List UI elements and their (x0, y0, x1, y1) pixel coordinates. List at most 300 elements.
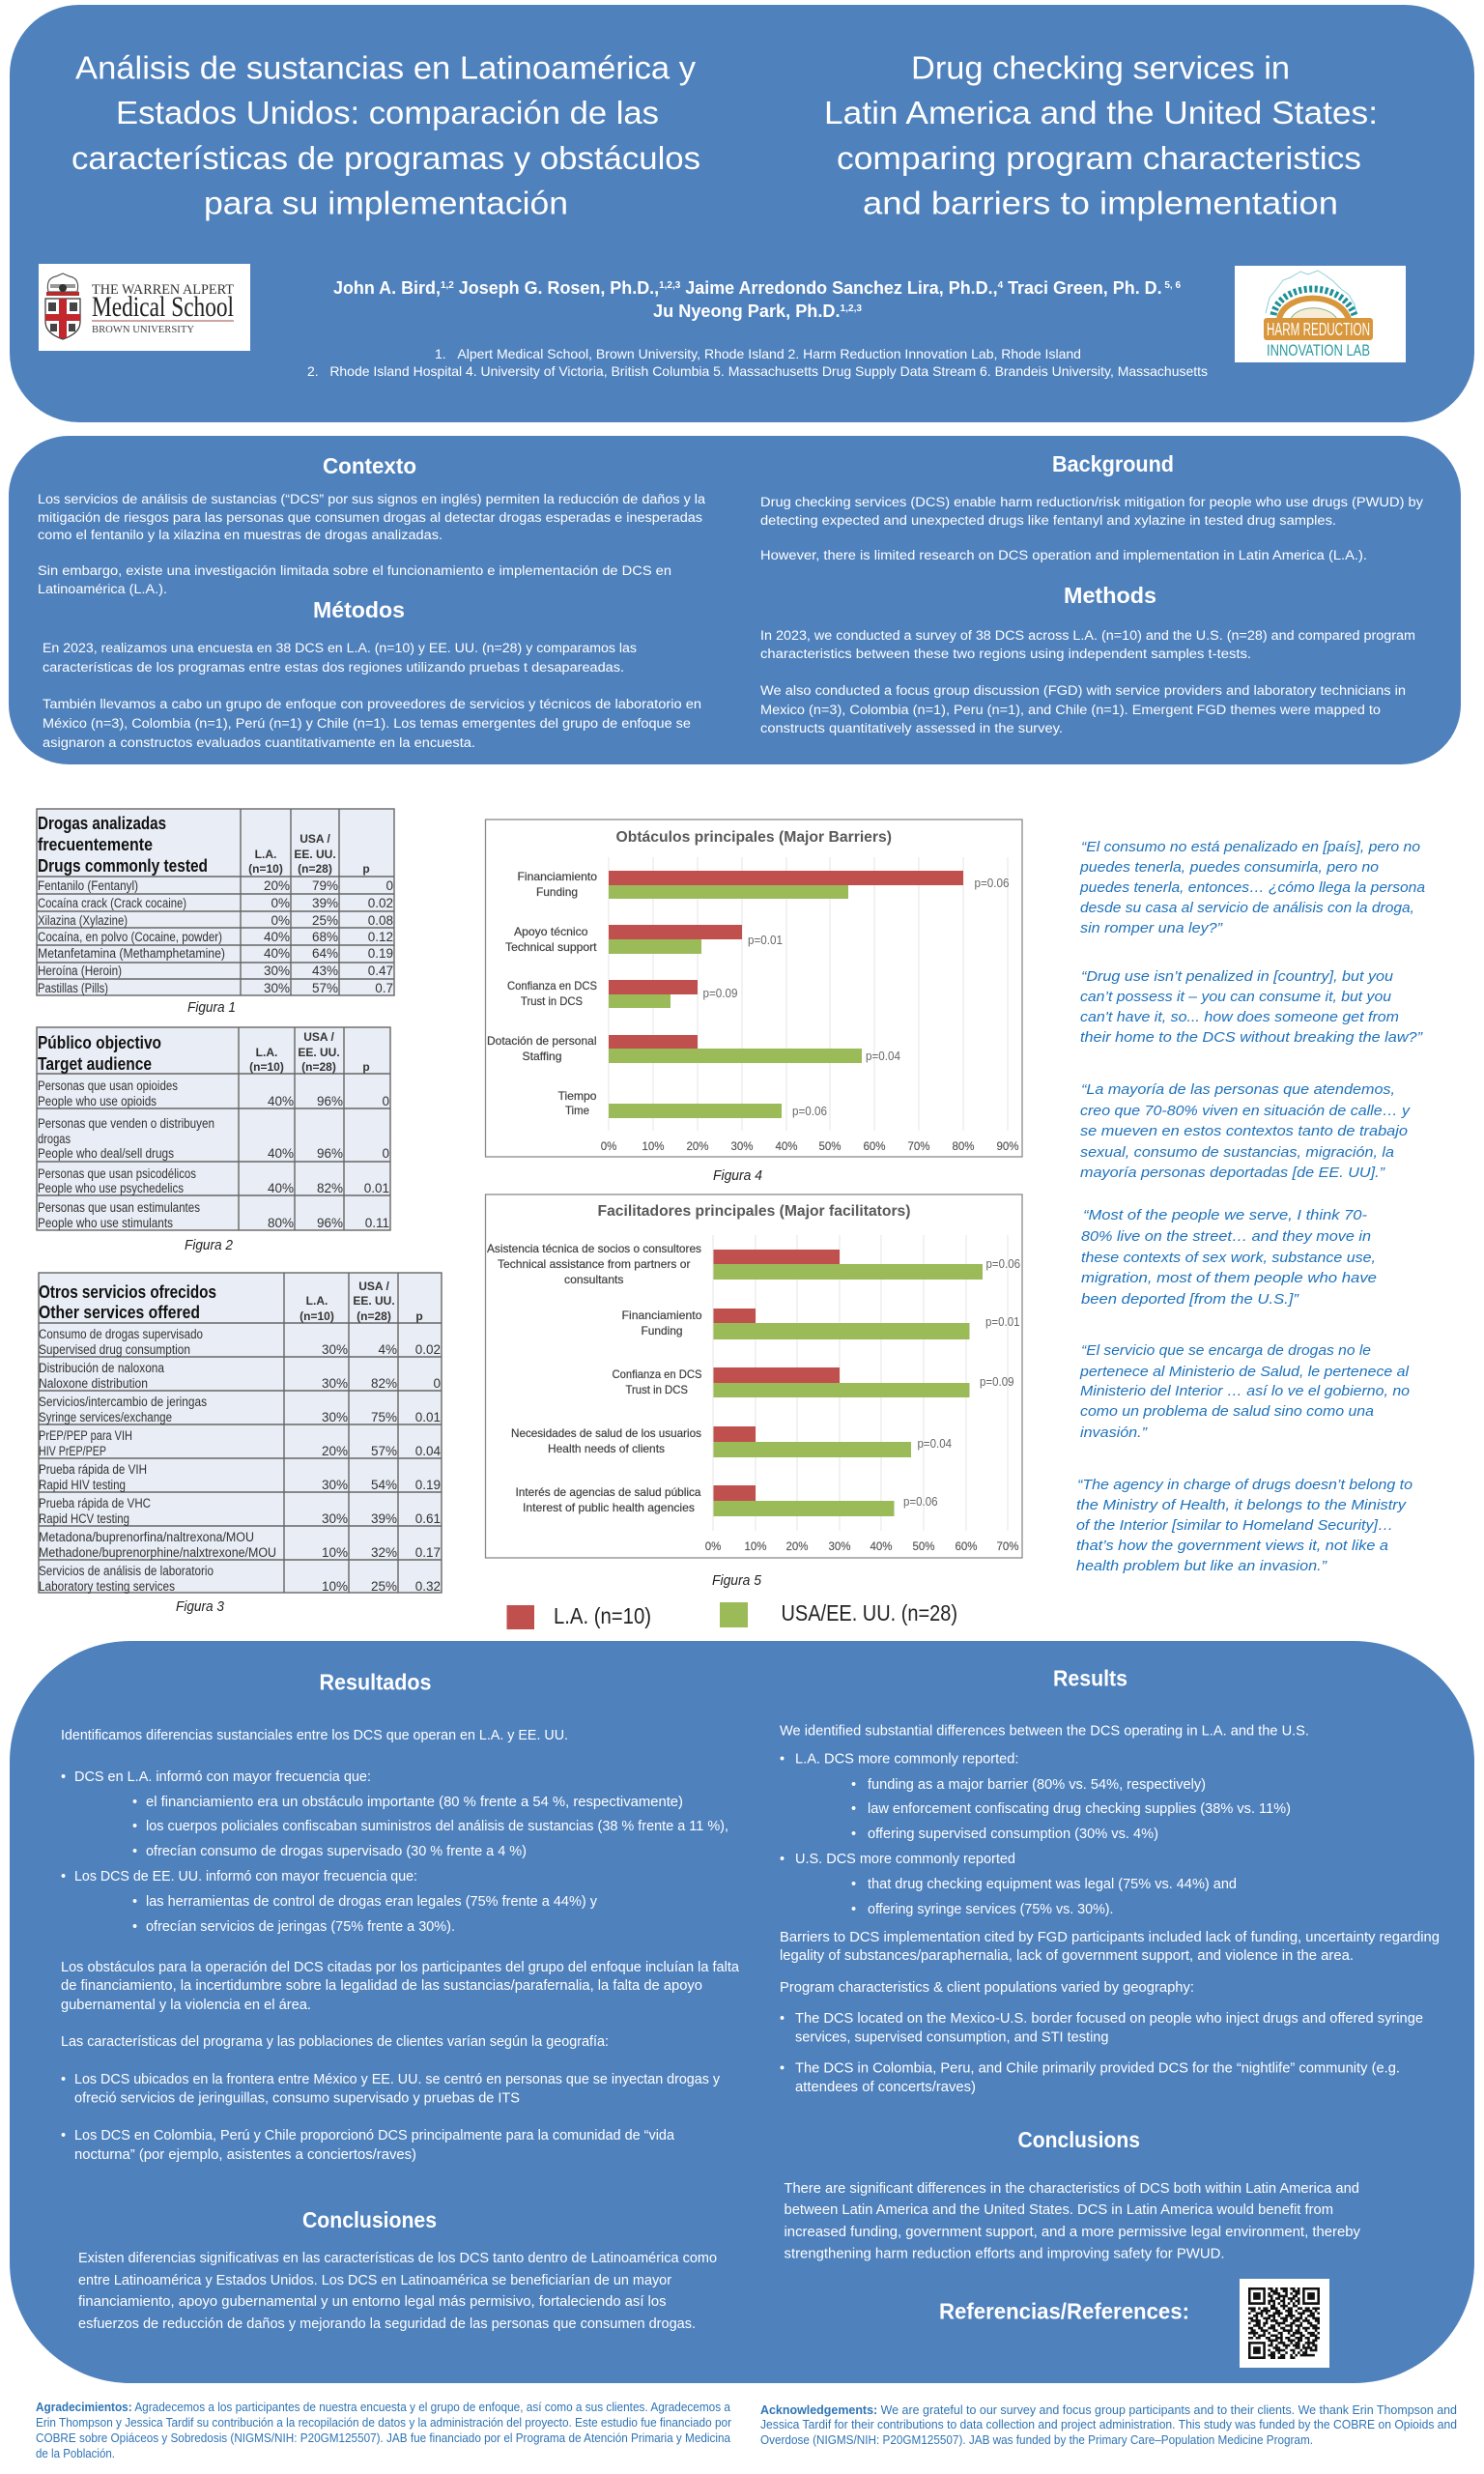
axis labels: 0% (601, 1141, 616, 1153)
table: other services offered: p (415, 1309, 423, 1323)
caption: Figura 3: Figura 3 (176, 1598, 225, 1615)
acknowledgments: English: Acknowledgements: We are grateful to our survey and focus group participants and to their clients. We thank Erin Thompson and (760, 2403, 1457, 2417)
text: Results: offering syringe services (75% vs. 30%). (868, 1902, 1113, 1917)
table: other services offered: 54% (371, 1478, 397, 1492)
title: English (824, 50, 1378, 220)
text: Resultados: • (61, 1769, 66, 1785)
quote 5: como un problema de salud sino como una (1080, 1403, 1374, 1420)
axis labels: 50% (912, 1541, 935, 1553)
heading: Methods: Methods (1064, 583, 1156, 608)
table: target audience: (n=28) (301, 1060, 336, 1074)
table: drugs commonly tested: Drogas analizadas (38, 814, 166, 833)
table: target audience: 0.01 (364, 1181, 389, 1195)
legend: USA/EE. UU. (n=28) (781, 1600, 957, 1625)
text: Results: funding as a major barrier (80% vs. 54%, respectively) (868, 1777, 1206, 1793)
table: other services offered: 0.61 (415, 1511, 441, 1526)
text: Results: We identified substantial differences between the DCS operating in L.A. and the U.S. (780, 1724, 1309, 1740)
title: Spanish: Análisis de sustancias en Latinoamérica y (75, 50, 697, 85)
text: Results: The DCS in Colombia, Peru, and Chile primarily provided DCS for the “nightlife” community (e.g. (795, 2060, 1400, 2076)
p values: p=0.06 (792, 1105, 827, 1118)
text: Resultados: las herramientas de control de drogas eran legales (75% frente a 44%) y (146, 1894, 598, 1910)
category labels: Confianza en DCS (507, 979, 597, 992)
title: Spanish: para su implementación (204, 186, 568, 220)
table: drugs commonly tested: 79% (312, 878, 338, 893)
caption: Figura 4: Figura 4 (713, 1167, 762, 1184)
table: target audience: Target audience (38, 1054, 152, 1074)
p values: p=0.01 (748, 934, 783, 947)
heading: Conclusions: Conclusions (1018, 2127, 1140, 2152)
p values: p=0.06 (985, 1257, 1020, 1271)
table: target audience: People who use opioids (38, 1094, 157, 1108)
logo: Harm Reduction Innovation Lab: INNOVATION LAB (1267, 341, 1370, 360)
table: drugs commonly tested: 0% (271, 896, 290, 910)
table: target audience: 40% (268, 1094, 294, 1108)
table: drugs commonly tested: p (362, 862, 370, 876)
bars: USA (609, 885, 862, 1118)
text: Resultados: de financiamiento, la incertidumbre sobre la legalidad de las sustancias/parafernalia, la falta de apoyo (61, 1978, 702, 1994)
text: Métodos: asignaron a constructos evaluados cuantitativamente en la encuesta. (43, 735, 475, 750)
table: other services offered: Prueba rápida de VIH (39, 1462, 147, 1477)
text: Results: • (851, 1877, 856, 1892)
affiliations (307, 346, 1208, 379)
panel: header (10, 5, 1474, 422)
category labels: Asistencia técnica de socios o consultores (487, 1242, 701, 1255)
table: other services offered: 0.04 (415, 1444, 441, 1458)
table: other services offered: 30% (322, 1342, 348, 1357)
table: other services offered: 25% (371, 1579, 397, 1594)
text: Resultados: Los obstáculos para la operación del DCS citadas por los participantes del grupo del enfoque incluían la falta (61, 1960, 740, 1975)
table: drugs commonly tested: 0% (271, 913, 290, 928)
axis labels: 10% (744, 1541, 767, 1553)
quote 5 (1079, 1342, 1410, 1441)
text: Background (760, 495, 1423, 562)
authors: Joseph G. Rosen, Ph.D., (454, 278, 659, 298)
text: Methods: constructs quantitatively assessed in the survey. (760, 721, 1063, 735)
QR code (1240, 2279, 1329, 2368)
table: drugs commonly tested: 0.12 (368, 930, 393, 944)
text: Results: • (851, 1827, 856, 1842)
quote 4: been deported [from the U.S.]” (1081, 1291, 1299, 1308)
table: other services offered: (n=10) (300, 1309, 334, 1323)
axis labels: 70% (996, 1541, 1019, 1553)
text: Results: • (851, 1801, 856, 1817)
table: target audience: EE. UU. (298, 1046, 340, 1059)
text: Results: • (780, 2060, 785, 2076)
authors: 5, 6 (1162, 280, 1181, 291)
p values: p=0.09 (980, 1375, 1014, 1389)
chart: major facilitators: Facilitadores principales (Major facilitators) (597, 1203, 910, 1220)
table: drugs commonly tested: 0.47 (368, 964, 393, 978)
table: target audience: 0 (382, 1146, 389, 1161)
text: Métodos: México (n=3), Colombia (n=1), Perú (n=1) y Chile (n=1). Los temas emergentes del grupo de enfoque se (43, 716, 691, 731)
table: other services offered: 4% (378, 1342, 397, 1357)
table: other services offered: 0.01 (415, 1410, 441, 1424)
axis labels: 30% (828, 1541, 851, 1553)
table: other services offered: Consumo de drogas supervisado (39, 1327, 203, 1341)
quote 4: these contexts of sex work, substance use, (1081, 1250, 1376, 1266)
title: English: Latin America and the United States: (824, 95, 1378, 130)
axis labels: 40% (870, 1541, 893, 1553)
quote 3: “La mayoría de las personas que atendemos, (1081, 1081, 1395, 1098)
text: Resultados: • (132, 1919, 137, 1935)
category labels: Necesidades de salud de los usuarios (511, 1426, 701, 1440)
table: other services offered: Methadone/buprenorphine/nalxtrexone/MOU (39, 1545, 276, 1560)
category labels (487, 870, 597, 1117)
table: target audience: Personas que venden o distribuyen (38, 1116, 214, 1131)
table: drugs commonly tested: Cocaína crack (Crack cocaine) (38, 896, 186, 910)
logo: Warren Alpert Medical School: THE WARREN ALPERT (92, 282, 234, 298)
table: other services offered: 0.32 (415, 1579, 441, 1594)
quote 1: puedes tenerla, puedes consumirla, pero no (1079, 859, 1379, 876)
table: other services offered: 30% (322, 1376, 348, 1391)
category labels: Apoyo técnico (514, 925, 588, 938)
chart: major facilitators (485, 1194, 1022, 1558)
text: Resultados: el financiamiento era un obstáculo importante (80 % frente a 54 %, respectivamente) (146, 1795, 683, 1810)
authors (333, 278, 1181, 321)
table: drugs commonly tested: L.A. (255, 848, 276, 861)
table: drugs commonly tested: 40% (264, 946, 290, 961)
text: Results: • (780, 1751, 785, 1767)
table: other services offered: 30% (322, 1478, 348, 1492)
category labels: Dotación de personal (487, 1034, 597, 1048)
text: Contexto: Los servicios de análisis de sustancias (“DCS” por sus signos en inglés) permiten la reducción de daños y la (38, 492, 706, 506)
p values (903, 1257, 1020, 1509)
text: Results: The DCS located on the Mexico-U.S. border focused on people who inject drugs and offered syringe (795, 2011, 1423, 2027)
authors: 1,2,3 (659, 280, 681, 291)
text: Conclusiones (78, 2251, 717, 2332)
text: Conclusions (785, 2181, 1361, 2261)
table: drugs commonly tested: 39% (312, 896, 338, 910)
table: target audience: USA / (303, 1030, 334, 1044)
text: Results: U.S. DCS more commonly reported (795, 1852, 1015, 1867)
quote 6: of the Interior [similar to Homeland Security]… (1076, 1517, 1393, 1534)
table: drugs commonly tested: Pastillas (Pills) (38, 981, 108, 995)
table: target audience (37, 1027, 390, 1230)
category labels: Funding (536, 885, 578, 899)
table: target audience: Personas que usan psicodélicos (38, 1166, 196, 1181)
quote 1: puedes tenerla, entonces… ¿cómo llega la persona (1079, 879, 1425, 896)
quote 5: Ministerio del Interior … así lo ve el gobierno, no (1080, 1383, 1410, 1399)
table: drugs commonly tested: 0.7 (375, 981, 393, 995)
affiliations: 1. Alpert Medical School, Brown University, Rhode Island 2. Harm Reduction Innovation Lab, Rhode Island (435, 346, 1081, 361)
table: other services offered: Distribución de naloxona (39, 1361, 164, 1375)
text: Contexto: Latinoamérica (L.A.). (38, 582, 167, 596)
table: target audience: People who deal/sell drugs (38, 1146, 174, 1161)
quote 5: invasión.” (1080, 1424, 1148, 1441)
quote 2: can't have it, so... how does someone get from (1080, 1009, 1399, 1025)
table: other services offered: Supervised drug consumption (39, 1342, 190, 1357)
table: drugs commonly tested: (n=10) (248, 862, 283, 876)
text: Results: • (851, 1902, 856, 1917)
axis labels (601, 1141, 1019, 1153)
quote 3 (1080, 1081, 1412, 1181)
authors: Jaime Arredondo Sanchez Lira, Ph.D., (680, 278, 998, 298)
quote 1: “El consumo no está penalizado en [país], pero no (1081, 839, 1420, 855)
table: drugs commonly tested: 0.08 (368, 913, 393, 928)
text: Resultados: • (132, 1819, 137, 1834)
table: drugs commonly tested: Metanfetamina (Methamphetamine) (38, 946, 225, 961)
heading: Background: Background (1052, 451, 1174, 476)
category labels: Interest of public health agencies (523, 1501, 695, 1514)
text: Results: legality of substances/paraphernalia, lack of government support, and violence in the area. (780, 1948, 1354, 1964)
title: English: comparing program characteristics (837, 140, 1361, 176)
category labels: Technical assistance from partners or (498, 1257, 691, 1271)
acknowledgments: Spanish: de la Población. (36, 2447, 115, 2460)
text: Results: services, supervised consumption, and STI testing (795, 2029, 1109, 2045)
heading: Results: Results (1053, 1666, 1127, 1691)
table: other services offered: 39% (371, 1511, 397, 1526)
heading: references: Referencias/References: (939, 2298, 1189, 2323)
text: Resultados: • (132, 1844, 137, 1859)
title: Spanish (71, 50, 700, 220)
header background (10, 5, 1474, 422)
quote 3: se mueven en estos contextos tanto de trabajo (1080, 1123, 1408, 1139)
text: Resultados: gubernamental y la violencia en el área. (61, 1998, 311, 2013)
legend: L.A. (n=10) (554, 1603, 651, 1628)
table: other services offered: 32% (371, 1545, 397, 1560)
text: Results: law enforcement confiscating drug checking supplies (38% vs. 11%) (868, 1801, 1291, 1817)
table: drugs commonly tested: Xilazina (Xylazine) (38, 913, 128, 928)
category labels: Staffing (522, 1050, 562, 1063)
text: Resultados: ofrecían consumo de drogas supervisado (30 % frente a 4 %) (146, 1844, 527, 1859)
p values: p=0.09 (703, 987, 738, 1000)
table: drugs commonly tested: Heroína (Heroin) (38, 964, 122, 978)
text: Background: Drug checking services (DCS) enable harm reduction/risk mitigation for people who use drugs (PWUD) by (760, 495, 1423, 509)
table: target audience: People who use psychedelics (38, 1181, 184, 1195)
text: Conclusiones: financiamiento, apoyo gubernamental y un entorno legal más permisivo, fortaleciendo así los (78, 2294, 667, 2310)
quote 4: migration, most of them people who have (1081, 1270, 1377, 1286)
axis labels: 20% (785, 1541, 809, 1553)
table: other services offered: Servicios de análisis de laboratorio (39, 1564, 214, 1578)
axis labels: 10% (642, 1141, 665, 1153)
table: target audience: drogas (38, 1132, 71, 1146)
text: Conclusiones: entre Latinoamérica y Estados Unidos. Los DCS en Latinoamérica se beneficiarían de un mayor (78, 2273, 671, 2288)
heading: Conclusiones: Conclusiones (302, 2207, 437, 2232)
axis labels: 40% (775, 1141, 798, 1153)
title: English: and barriers to implementation (863, 186, 1338, 220)
authors: 1,2,3 (841, 303, 862, 314)
table: other services offered: 10% (322, 1545, 348, 1560)
table: other services offered: 20% (322, 1444, 348, 1458)
authors: 4 (998, 280, 1004, 291)
authors: Traci Green, Ph. D. (1003, 278, 1162, 298)
text: Methods: Mexico (n=3), Colombia (n=1), Peru (n=1), and Chile (n=1). Emergent FGD themes were mapped to (760, 703, 1381, 717)
text: Results: offering supervised consumption (30% vs. 4%) (868, 1827, 1158, 1842)
table: target audience: p (362, 1060, 370, 1074)
axis labels: 30% (730, 1141, 754, 1153)
axis labels: 70% (907, 1141, 930, 1153)
quote 6: health problem but like an invasion.” (1076, 1558, 1327, 1574)
text: Resultados: nocturna” (por ejemplo, asistentes a conciertos/raves) (74, 2147, 416, 2163)
axis labels: 50% (818, 1141, 842, 1153)
text: Results: attendees of concerts/raves) (795, 2080, 976, 2095)
table: other services offered: Other services offered (39, 1303, 200, 1322)
table: drugs commonly tested: EE. UU. (294, 848, 336, 861)
table: drugs commonly tested: Drugs commonly tested (38, 856, 208, 876)
affiliations: 2. Rhode Island Hospital 4. University of Victoria, British Columbia 5. Massachusetts Drug Supply Data Stream 6. Brandeis University, Massachusetts (307, 363, 1208, 379)
text: Conclusions: increased funding, government support, and a more permissive legal environment, thereby (785, 2225, 1361, 2240)
text: Resultados: • (61, 2128, 66, 2143)
table: other services offered: (n=28) (357, 1309, 391, 1323)
text: Resultados: ofrecían servicios de jeringas (75% frente a 30%). (146, 1919, 455, 1935)
axis labels: 60% (955, 1541, 978, 1553)
quote 3: creo que 70-80% viven en situación de calle… y (1080, 1103, 1412, 1119)
text: Conclusions: strengthening harm reduction efforts and improving safety for PWUD. (785, 2246, 1225, 2261)
category labels: Confianza en DCS (613, 1367, 701, 1381)
bars: L.A. (609, 871, 963, 1050)
table: other services offered: 30% (322, 1511, 348, 1526)
table: drugs commonly tested: 57% (312, 981, 338, 995)
text: Resultados: Los DCS en Colombia, Perú y Chile proporcionó DCS principalmente para la comunidad de “vida (74, 2128, 675, 2143)
table: target audience: People who use stimulants (38, 1216, 173, 1230)
table: target audience: 96% (317, 1094, 343, 1108)
table: target audience: 82% (317, 1181, 343, 1195)
text: Conclusions: between Latin America and the United States. DCS in Latin America would benefit from (785, 2202, 1333, 2218)
table: other services offered: Metadona/buprenorfina/naltrexona/MOU (39, 1530, 254, 1544)
text: Results (780, 1724, 1440, 2095)
quote 5: “El servicio que se encarga de drogas no le (1081, 1342, 1371, 1359)
text: Methods (760, 628, 1415, 735)
text: Resultados: • (132, 1894, 137, 1910)
quote 1: sin romper una ley?” (1080, 920, 1223, 936)
axis labels: 0% (705, 1541, 721, 1553)
table: other services offered: 0.17 (415, 1545, 441, 1560)
table: target audience: 80% (268, 1216, 294, 1230)
quotes column (1076, 839, 1425, 1574)
table: drugs commonly tested: USA / (300, 832, 330, 846)
caption: Figura 1: Figura 1 (187, 999, 236, 1016)
table: other services offered: 82% (371, 1376, 397, 1391)
acknowledgments: Spanish: Agradecimientos: Agradecemos a los participantes de nuestra encuesta y el grupo de enfoque, así como a sus clientes. Agradecemos a (36, 2401, 730, 2414)
text: Resultados: • (61, 2072, 66, 2087)
authors: 1,2 (441, 280, 454, 291)
table: other services offered: USA / (358, 1280, 389, 1293)
table: drugs commonly tested: Fentanilo (Fentanyl) (38, 878, 138, 893)
table: target audience: Público objectivo (38, 1033, 161, 1052)
text: Results: that drug checking equipment was legal (75% vs. 44%) and (868, 1877, 1237, 1892)
text: Background: However, there is limited research on DCS operation and implementation in Latin America (L.A.). (760, 548, 1367, 562)
table: drugs commonly tested: 40% (264, 930, 290, 944)
category labels: Financiamiento (622, 1309, 702, 1322)
text: Results: • (851, 1777, 856, 1793)
table: other services offered: L.A. (306, 1294, 328, 1308)
table: other services offered: PrEP/PEP para VIH (39, 1428, 132, 1443)
panel background (9, 436, 1461, 764)
category labels: consultants (564, 1273, 624, 1286)
table: drugs commonly tested: 30% (264, 964, 290, 978)
text: Resultados: Las características del programa y las poblaciones de clientes varían según la geografía: (61, 2034, 609, 2050)
bars: L.A. (713, 1250, 840, 1501)
category labels: Trust in DCS (521, 994, 583, 1008)
text: Resultados: ofreció servicios de jeringuillas, consumo supervisado y pruebas de ITS (74, 2091, 520, 2107)
table: drugs commonly tested: (n=28) (298, 862, 332, 876)
table: drugs commonly tested: 30% (264, 981, 290, 995)
panel background (10, 1641, 1474, 2383)
quote 6 (1076, 1477, 1413, 1574)
acknowledgments: English: Overdose (NIGMS/NIH: P20GM125507). JAB was funded by the Primary Care–Population Medicine Program. (760, 2433, 1313, 2447)
table: target audience: L.A. (256, 1046, 277, 1059)
acknowledgments: English: Jessica Tardif for their contributions to data collection and project administration. This study was funded by the COBRE on Opioids and (760, 2418, 1457, 2431)
p values: p=0.06 (974, 877, 1010, 890)
text: Resultados: Identificamos diferencias sustanciales entre los DCS que operan en L.A. y EE. UU. (61, 1728, 568, 1743)
category labels: Technical support (505, 940, 597, 954)
text: Resultados: • (61, 1869, 66, 1884)
chart: major barriers (485, 820, 1022, 1157)
table: other services offered: Naloxone distribution (39, 1376, 148, 1391)
acknowledgments: English (760, 2403, 1457, 2447)
text: Resultados: • (132, 1795, 137, 1810)
category labels: Trust in DCS (626, 1383, 688, 1396)
legend (506, 1600, 957, 1629)
acknowledgments: Spanish: Erin Thompson y Jessica Tardif su contribución a la recopilación de datos y la administración del proyecto. Este estudio fue financiado por (36, 2416, 731, 2430)
table: other services offered: Otros servicios ofrecidos (39, 1282, 216, 1302)
text: Resultados: Los DCS de EE. UU. informó con mayor frecuencia que: (74, 1869, 417, 1884)
table: drugs commonly tested: frecuentemente (38, 835, 153, 854)
quote 3: mayoría personas deportadas [de EE. UU].” (1080, 1165, 1385, 1181)
acknowledgments: Spanish (36, 2401, 731, 2460)
text: Conclusions: There are significant differences in the characteristics of DCS both within Latin America and (785, 2181, 1359, 2197)
text: Resultados: los cuerpos policiales confiscaban suministros del análisis de sustancias (38 % frente a 11 %), (146, 1819, 728, 1834)
table: target audience: 40% (268, 1181, 294, 1195)
axis labels: 90% (996, 1141, 1019, 1153)
p values: p=0.04 (918, 1437, 952, 1451)
text: Conclusiones: Existen diferencias significativas en las características de los DCS tanto dentro de Latinoamérica como (78, 2251, 717, 2266)
logo: Harm Reduction Innovation Lab (1235, 266, 1406, 362)
axis labels: 20% (686, 1141, 709, 1153)
p values: p=0.06 (903, 1495, 938, 1509)
authors: Ju Nyeong Park, Ph.D. (653, 302, 839, 321)
table: target audience: (n=10) (249, 1060, 284, 1074)
quote 4: “Most of the people we serve, I think 70- (1083, 1207, 1367, 1223)
table: target audience: 96% (317, 1146, 343, 1161)
text: Contexto: mitigación de riesgos para las personas que consumen drogas al detectar drogas esperadas e inesperadas (38, 510, 702, 525)
panel: results and conclusions (10, 1641, 1474, 2383)
quote 6: the Ministry of Health, it belongs to the Ministry (1076, 1497, 1408, 1513)
axis labels: 60% (863, 1141, 886, 1153)
table: other services offered: 75% (371, 1410, 397, 1424)
acknowledgments: Spanish: COBRE sobre Opiáceos y Sobredosis (NIGMS/NIH: P20GM125507). JAB fue financiado por el Programa de Atención Primaria y Medicina (36, 2431, 730, 2445)
table: other services offered: 10% (322, 1579, 348, 1594)
quote 1: desde su casa al servicio de análisis con la droga, (1080, 900, 1414, 916)
text: Métodos (43, 641, 701, 750)
table: target audience: Personas que usan opioides (38, 1079, 178, 1093)
text: Methods: In 2023, we conducted a survey of 38 DCS across L.A. (n=10) and the U.S. (n=28) and compared program (760, 628, 1415, 643)
table: target audience: 0.11 (365, 1216, 389, 1230)
logo: Warren Alpert Medical School: BROWN UNIVERSITY (92, 325, 194, 335)
table: drugs commonly tested: 0.02 (368, 896, 393, 910)
text: Methods: We also conducted a focus group discussion (FGD) with service providers and laboratory technicians in (760, 683, 1406, 698)
table: drugs commonly tested: 64% (312, 946, 338, 961)
text: Results: Program characteristics & client populations varied by geography: (780, 1980, 1194, 1996)
caption: Figura 2: Figura 2 (185, 1237, 234, 1253)
table: other services offered: Rapid HCV testing (39, 1511, 129, 1526)
p values: p=0.04 (866, 1050, 900, 1063)
table: target audience: Personas que usan estimulantes (38, 1200, 200, 1215)
logo: Warren Alpert Medical School (39, 264, 250, 351)
authors: John A. Bird, (333, 278, 441, 298)
title: English: Drug checking services in (911, 50, 1290, 85)
table: other services offered: EE. UU. (353, 1294, 395, 1308)
text: Results: Barriers to DCS implementation cited by FGD participants included lack of funding, uncertainty regarding (780, 1930, 1440, 1945)
text: Contexto (38, 492, 706, 596)
category labels: Tiempo (558, 1089, 597, 1103)
quote 6: that’s how the government views it, not like a (1076, 1538, 1388, 1554)
text: Contexto: Sin embargo, existe una investigación limitada sobre el funcionamiento e implementación de DCS en (38, 563, 671, 578)
quote 2: can’t possess it – you can consume it, but you (1080, 989, 1392, 1005)
table: drugs commonly tested: 0.19 (368, 946, 393, 961)
axis labels (705, 1541, 1019, 1553)
text: Background: detecting expected and unexpected drugs like fentanyl and xylazine in tested drug samples. (760, 513, 1336, 528)
